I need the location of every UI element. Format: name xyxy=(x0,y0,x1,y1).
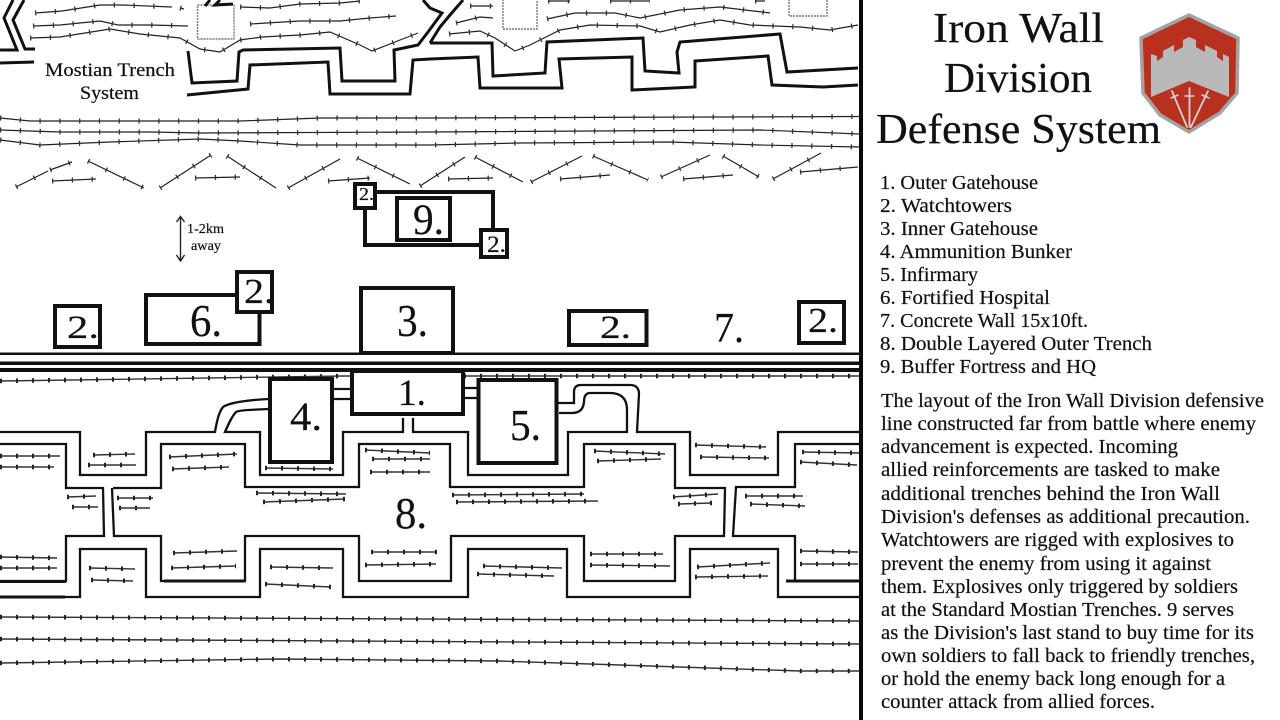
inner gatehouse (3): 3. xyxy=(397,296,428,346)
legend list: 3. Inner Gatehouse xyxy=(880,219,1038,240)
ammunition bunker (4): 4. xyxy=(290,394,322,439)
description text: line constructed far from battle where enemy xyxy=(881,414,1256,435)
concrete wall label (7): 7. xyxy=(714,306,744,352)
title xyxy=(876,6,1161,153)
distance note: 1-2km away: 1-2km xyxy=(187,221,225,236)
fortified hospital (6): 2. xyxy=(244,272,274,311)
buffer fortress and HQ (9): 9. xyxy=(413,197,444,244)
legend list: 6. Fortified Hospital xyxy=(880,288,1051,309)
description text: as the Division's last stand to buy time for its xyxy=(881,623,1254,644)
legend list: 4. Ammunition Bunker xyxy=(880,242,1073,263)
description text: them. Explosives only triggered by soldiers xyxy=(881,577,1238,598)
title: Defense System xyxy=(876,107,1161,153)
watchtower right: 2. xyxy=(808,301,838,340)
legend list xyxy=(880,173,1152,378)
description text: counter attack from allied forces. xyxy=(881,692,1155,713)
legend list: 5. Infirmary xyxy=(880,265,978,286)
legend list: 9. Buffer Fortress and HQ xyxy=(880,357,1096,378)
label: Mostian Trench System: System xyxy=(80,84,140,104)
description text: prevent the enemy from using it against xyxy=(881,554,1212,575)
title: Division xyxy=(944,56,1092,102)
label: Mostian Trench System: Mostian Trench xyxy=(45,61,175,81)
description text: own soldiers to fall back to friendly trenches, xyxy=(881,646,1255,667)
watchtower left xyxy=(55,306,100,347)
legend list: 2. Watchtowers xyxy=(880,196,1012,217)
Mostian trench lines xyxy=(0,0,858,95)
description text: advancement is expected. Incoming xyxy=(881,437,1178,458)
barbed wire behind Mostian trenches xyxy=(0,1,860,188)
inner gatehouse (3) xyxy=(361,288,453,353)
icon: shield emblem xyxy=(1141,15,1238,132)
trench outlines xyxy=(0,385,860,597)
description text: allied reinforcements are tasked to make xyxy=(881,460,1220,481)
watchtower left: 2. xyxy=(67,310,99,346)
distance note: 1-2km away: away xyxy=(191,238,221,253)
divider bar xyxy=(859,0,863,720)
outer gatehouse (1): 1. xyxy=(398,373,426,414)
outer gatehouse (1) xyxy=(352,371,463,414)
infirmary (5) xyxy=(478,380,556,463)
description text: Watchtowers are rigged with explosives to xyxy=(881,530,1234,551)
title: Iron Wall xyxy=(933,6,1104,52)
trench label: 8. xyxy=(395,489,427,538)
description text xyxy=(881,391,1264,713)
description text: at the Standard Mostian Trenches. 9 serves xyxy=(881,600,1234,621)
fortified hospital (6): 6. xyxy=(190,296,222,346)
legend list: 7. Concrete Wall 15x10ft. xyxy=(880,311,1088,332)
ammunition bunker (4) xyxy=(270,379,332,462)
description text: The layout of the Iron Wall Division defensive xyxy=(881,391,1264,412)
dotted buildings xyxy=(198,0,827,39)
legend list: 8. Double Layered Outer Trench xyxy=(880,334,1152,355)
buffer fortress and HQ (9): 2. xyxy=(359,184,374,204)
thick trench ends xyxy=(0,581,860,597)
infirmary (5): 5. xyxy=(510,401,541,450)
barbed wire inside the trench line xyxy=(0,376,860,671)
watchtower middle xyxy=(569,310,646,346)
description text: additional trenches behind the Iron Wall xyxy=(881,484,1221,505)
description text: Division's defenses as additional precaution. xyxy=(881,507,1250,528)
description text: or hold the enemy back long enough for a xyxy=(881,669,1225,690)
distance note: 1-2km away xyxy=(176,216,225,261)
double layered outer trench (8) xyxy=(0,376,860,671)
watchtower middle: 2. xyxy=(600,310,631,346)
fortified hospital (6) xyxy=(146,272,274,346)
buffer fortress and HQ (9): 2. xyxy=(487,232,506,257)
map: Mostian trench system (top) xyxy=(0,0,860,188)
watchtower right xyxy=(799,301,844,343)
label: Mostian Trench System xyxy=(45,61,175,104)
concrete wall lines xyxy=(0,352,859,372)
buffer fortress and HQ (9) xyxy=(355,184,507,257)
legend list: 1. Outer Gatehouse xyxy=(880,173,1038,194)
